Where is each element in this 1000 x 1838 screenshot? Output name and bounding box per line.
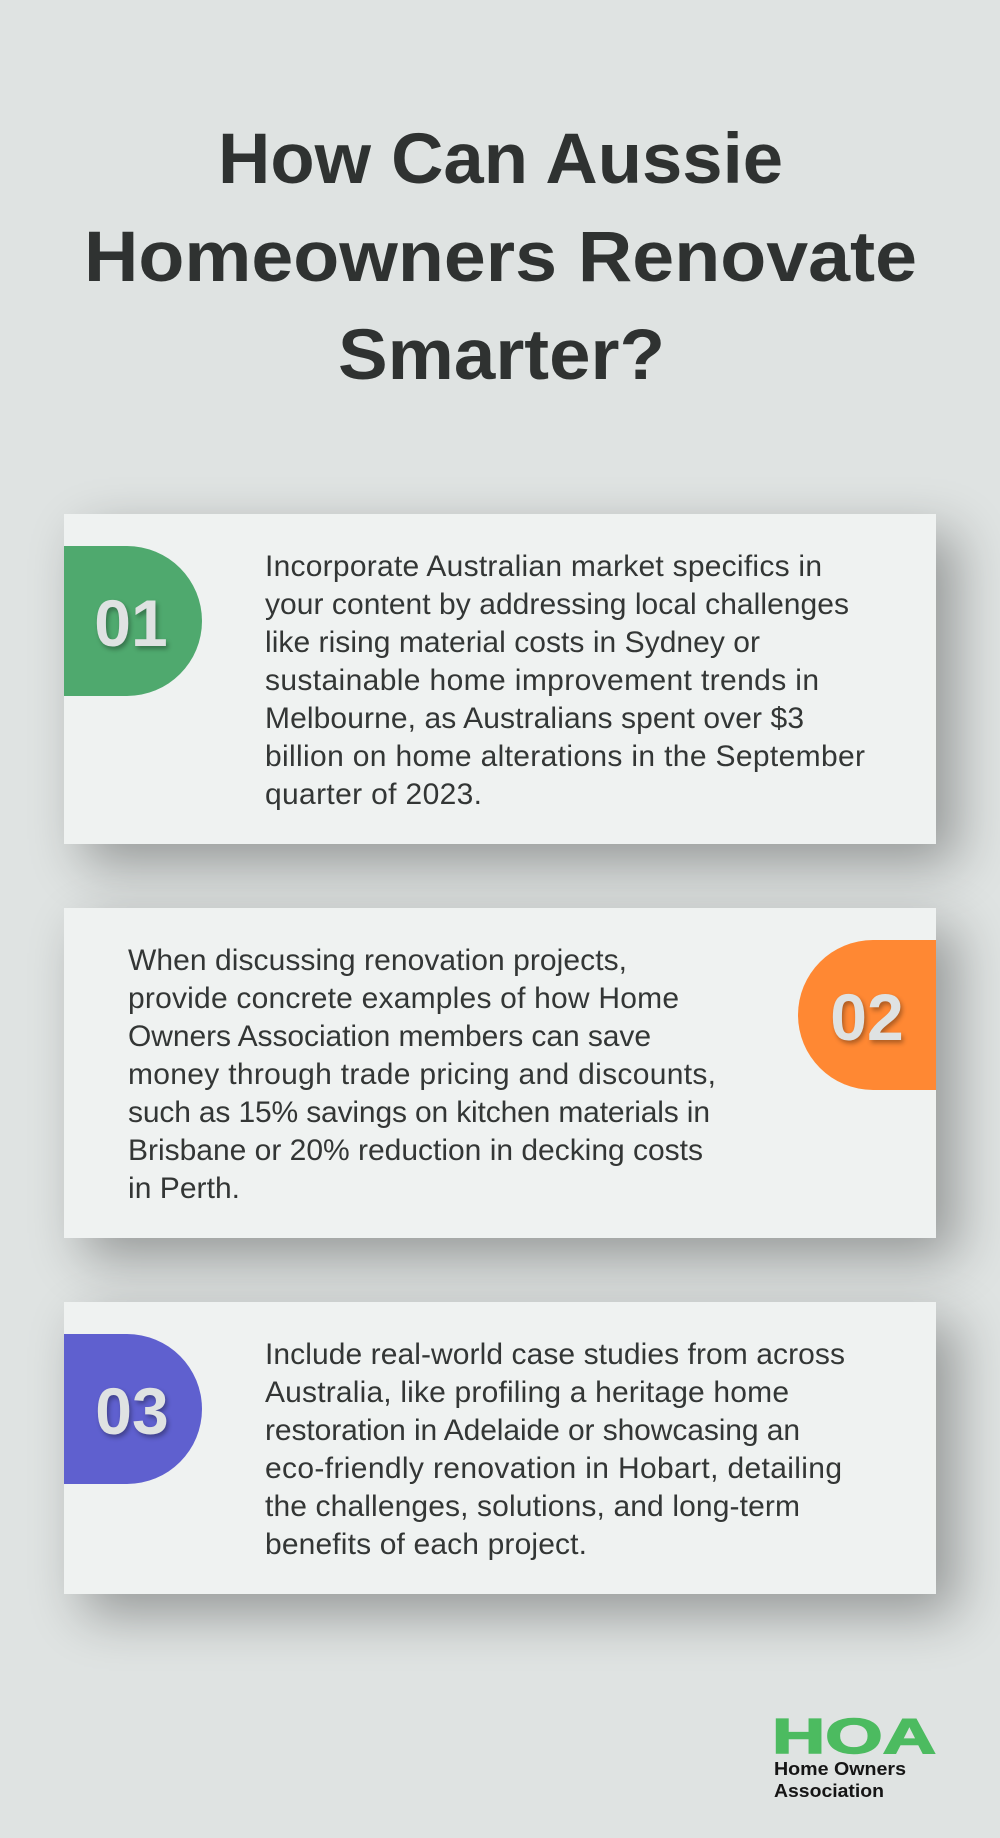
badge: 03 [64,1334,202,1484]
text block: tip 02: such as 15% savings on kitchen materials in [128,1096,710,1129]
text block: tip 03: eco-friendly renovation in Hobart, detailing [265,1452,842,1485]
text block: tip 03 [265,1338,845,1561]
title: Smarter? [338,316,665,395]
text block: tip 01: your content by addressing local challenges [265,588,849,621]
badge: 02: 02 [830,980,904,1054]
badge: 02 [798,940,936,1090]
badge: 01 [64,546,202,696]
text block: tip 03: benefits of each project. [265,1528,587,1561]
text block: tip 03: Australia, like profiling a heritage home [265,1376,789,1409]
text block: tip 02: Brisbane or 20% reduction in decking costs [128,1134,703,1167]
text block: tip 01: like rising material costs in Sydney or [265,626,760,659]
logo: Home Owners Association [772,1710,936,1801]
logo: Home Owners Association: HOA [772,1710,936,1764]
title: Homeowners Renovate [84,218,917,297]
title [84,120,917,395]
text block: tip 03: the challenges, solutions, and long-term [265,1490,800,1523]
text block: tip 01: sustainable home improvement trends in [265,664,819,697]
text block: tip 02: in Perth. [128,1172,240,1205]
logo: Home Owners Association: Home Owners [774,1759,906,1779]
panel: tip 02 [64,908,936,1238]
text block: tip 01: Melbourne, as Australians spent over $3 [265,702,804,735]
text block: tip 02: provide concrete examples of how Home [128,982,679,1015]
title: How Can Aussie [218,120,783,199]
badge: 01: 01 [94,586,168,660]
text block: tip 02: When discussing renovation projects, [128,944,627,977]
text block: tip 02 [128,944,716,1205]
panel: tip 01 [64,514,936,844]
panel: tip 03 [64,1302,936,1594]
text block: tip 01: Incorporate Australian market specifics in [265,550,822,583]
text block: tip 03: restoration in Adelaide or showcasing an [265,1414,800,1447]
text block: tip 02: Owners Association members can save [128,1020,651,1053]
text block: tip 01: quarter of 2023. [265,778,482,811]
text block: tip 01 [265,550,865,811]
text block: tip 03: Include real-world case studies from across [265,1338,845,1371]
text block: tip 01: billion on home alterations in the September [265,740,865,773]
text block: tip 02: money through trade pricing and discounts, [128,1058,716,1091]
badge: 03: 03 [95,1374,169,1448]
logo: Home Owners Association: Association [774,1781,884,1801]
